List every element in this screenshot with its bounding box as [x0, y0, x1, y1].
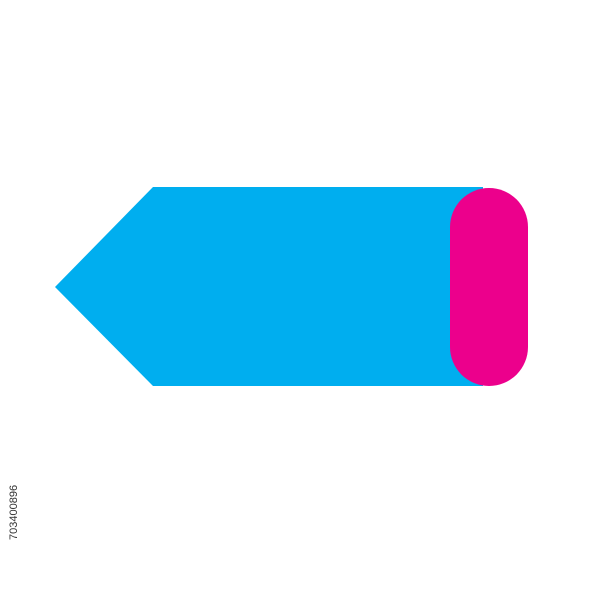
cap: magenta rounded end — [450, 188, 528, 386]
arrow: blue pointed body — [55, 187, 483, 386]
side id text: 703400896 — [8, 485, 20, 540]
